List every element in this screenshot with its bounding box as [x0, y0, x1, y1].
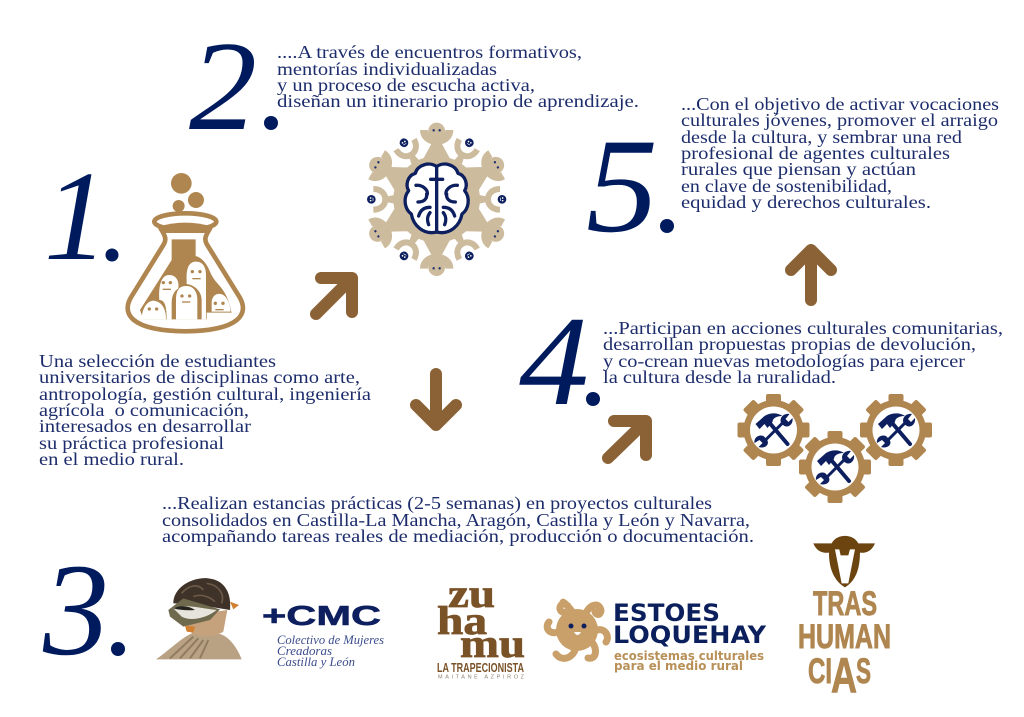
text block: step 3: consolidados en Castilla-La Mancha, Aragón, Castilla y León y Navarra,: [162, 510, 750, 530]
number 5: 5: [586, 112, 658, 261]
text block: step 1: Una selección de estudiantes: [39, 351, 276, 371]
logo: Zuhamu La Trapecionista: LA TRAPECIONISTA: [437, 660, 524, 675]
logo: Estoes Loquehay: [547, 599, 767, 673]
icon: three gears with tools: [738, 394, 932, 503]
logo: Trashumancias: HUMAN: [798, 618, 891, 656]
text block: step 1: universitarios de disciplinas como arte,: [39, 367, 360, 387]
text block: step 5: rurales que piensan y actúan: [681, 159, 916, 179]
logo: Zuhamu La Trapecionista: MAITANE AZPIROZ: [438, 674, 525, 680]
number 2: 2: [189, 15, 257, 157]
text block: step 3: [162, 493, 754, 546]
logo: Zuhamu La Trapecionista: [437, 571, 525, 680]
arrow: step 1 to step 2: [316, 278, 352, 314]
logo: Zuhamu La Trapecionista: mu: [460, 621, 525, 666]
text block: step 4: [603, 318, 1003, 387]
logo: +CMC: Castilla y León: [277, 655, 355, 669]
text block: step 4: la cultura desde la ruralidad.: [603, 367, 836, 387]
text block: step 4: ...Participan en acciones culturales comunitarias,: [603, 318, 1003, 338]
logo: Zuhamu La Trapecionista: zu: [448, 571, 495, 616]
text block: step 2: diseñan un itinerario propio de aprendizaje.: [277, 91, 639, 111]
number 1: 1: [44, 145, 108, 287]
text block: step 5: [681, 94, 999, 212]
number 4: 4: [519, 290, 589, 432]
text block: step 2: y un proceso de escucha activa,: [277, 75, 535, 95]
logo: Zuhamu La Trapecionista: ha: [437, 598, 487, 643]
logo: +CMC: Colectivo de Mujeres: [277, 633, 384, 647]
text block: step 5: desde la cultura, y sembrar una red: [681, 127, 962, 147]
text block: step 3: ...Realizan estancias prácticas (2-5 semanas) en proyectos culturales: [162, 493, 712, 514]
text block: step 3: acompañando tareas reales de mediación, producción o documentación.: [162, 526, 754, 546]
text block: step 5: en clave de sostenibilidad,: [681, 176, 892, 196]
logo: +CMC: Creadoras: [277, 644, 332, 658]
text block: step 2: ....A través de encuentros formativos,: [277, 42, 582, 62]
arrow: step 4 up to step 5: [791, 250, 831, 300]
text block: step 5: ...Con el objetivo de activar vocaciones: [681, 94, 999, 114]
logo: Trashumancias: TRAS: [813, 585, 877, 623]
logo: Trashumancias: A: [831, 649, 857, 703]
logo: Estoes Loquehay: para el medio rural: [614, 659, 743, 673]
logo: Estoes Loquehay: LOQUEHAY: [613, 621, 767, 649]
arrow: step 1 down to step 3: [416, 374, 456, 425]
text block: step 5: culturales jóvenes, promover el arraigo: [681, 110, 998, 130]
text block: step 5: equidad y derechos culturales.: [681, 192, 931, 212]
logo: Trashumancias: [798, 536, 891, 703]
text block: step 4: desarrollan propuestas propias de devolución,: [603, 334, 976, 354]
logo: collage portrait: [156, 578, 242, 659]
text block: step 4: y co-crean nuevas metodologías para ejercer: [603, 351, 965, 371]
number 3: 3: [42, 536, 109, 683]
logo: +CMC: [262, 600, 384, 669]
text block: step 1: agrícola o comunicación,: [39, 400, 249, 420]
logo: Trashumancias: S: [856, 652, 871, 691]
text block: step 2: mentorías individualizadas: [277, 59, 497, 79]
text block: step 5: profesional de agentes culturales: [681, 143, 950, 163]
text block: step 2: [277, 42, 639, 111]
text block: step 1: antropología, gestión cultural, ingeniería: [39, 384, 371, 404]
text block: step 1: su práctica profesional: [39, 433, 224, 453]
text block: step 1: interesados en desarrollar: [39, 416, 251, 436]
logo: +CMC: +CMC: [262, 600, 381, 631]
text block: step 1: [39, 351, 371, 469]
text block: step 1: en el medio rural.: [39, 449, 184, 469]
arrow: step 3 to step 4: [608, 421, 646, 458]
logo: Trashumancias: CI: [808, 652, 832, 691]
logo: Estoes Loquehay: ecosistemas culturales: [614, 649, 764, 663]
icon: brain in circle of people: [364, 123, 510, 276]
icon: flask with people: [128, 173, 243, 331]
logo: Estoes Loquehay: ESTOES: [613, 599, 720, 627]
